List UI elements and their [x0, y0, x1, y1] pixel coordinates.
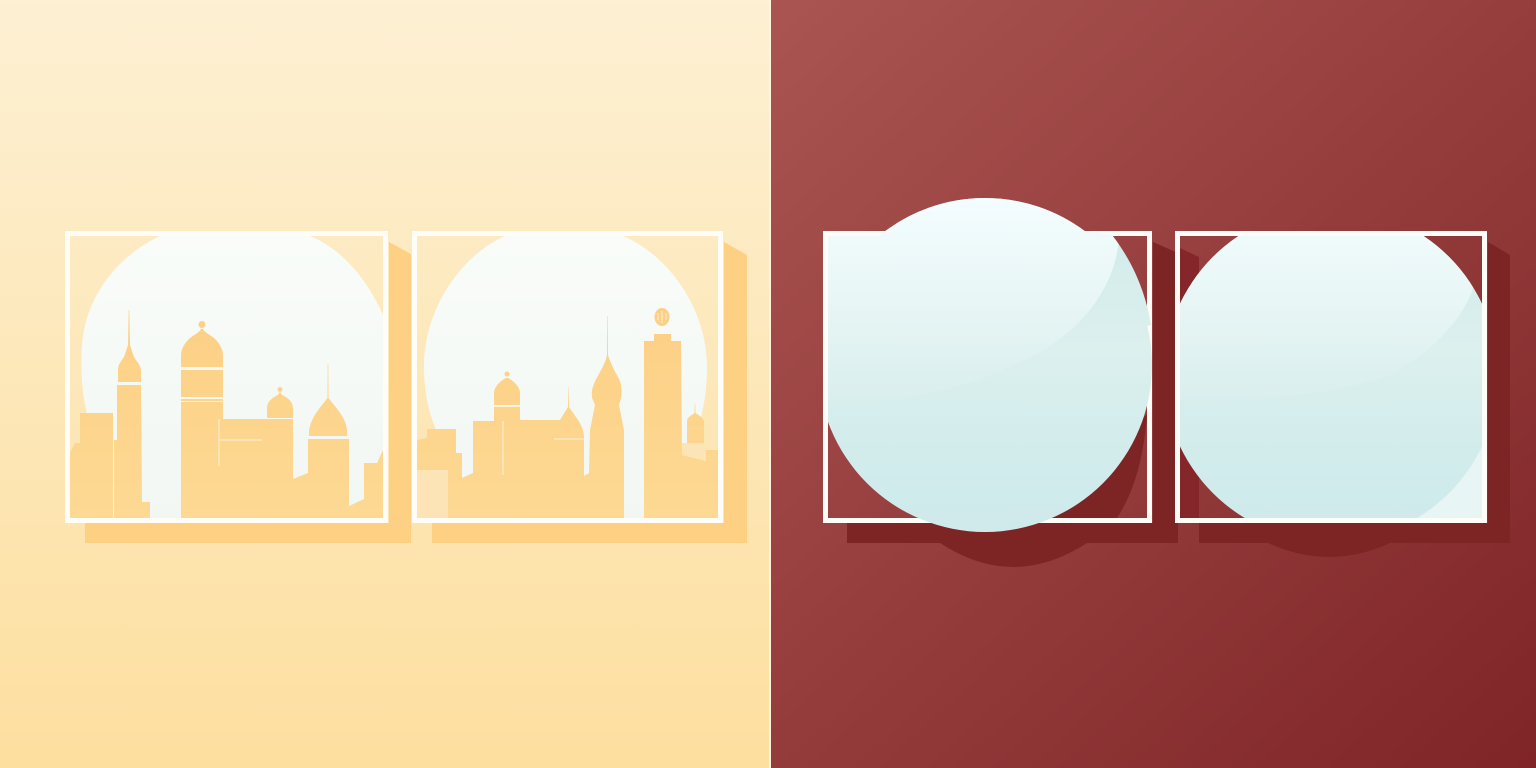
white frame: [826, 234, 1150, 520]
lens circle: [1180, 236, 1482, 518]
ornament detail and window lines: [494, 311, 666, 475]
panel: first skyline frame: [68, 234, 411, 543]
pale corner panel: [1417, 446, 1482, 518]
lens gloss highlight: [1180, 236, 1473, 335]
lens circle clipped at frame left edge: [828, 198, 1152, 532]
pale sun disc: [80, 236, 383, 518]
frame shadow: [85, 242, 411, 543]
frame and bump shadow: [1199, 242, 1510, 557]
skyline silhouette: [417, 308, 718, 518]
pale sun disc: [424, 236, 707, 518]
lens gloss highlight: [828, 198, 1118, 335]
white frame: [414, 234, 720, 520]
panel: first lens frame: [810, 190, 1178, 567]
skyline silhouette: [70, 310, 383, 518]
panel: left cream background: [0, 0, 770, 768]
window lines: [219, 419, 262, 466]
circle shadow inside frame: [1000, 415, 1147, 518]
panel: right maroon background: [770, 0, 1536, 768]
lens group clipped to frame: [1180, 236, 1482, 518]
panel: second lens frame: [1175, 231, 1510, 557]
panel: second skyline frame: [414, 234, 747, 543]
lens base shape: [828, 198, 1152, 532]
white frame: [68, 234, 386, 520]
white frame: [1178, 234, 1484, 520]
divider line between panels: [769, 0, 771, 768]
frame shadow: [432, 242, 747, 543]
frame and bump shadow: [847, 242, 1178, 567]
shadow strip inside frame: [1180, 248, 1199, 518]
light building blocks: [417, 443, 706, 518]
